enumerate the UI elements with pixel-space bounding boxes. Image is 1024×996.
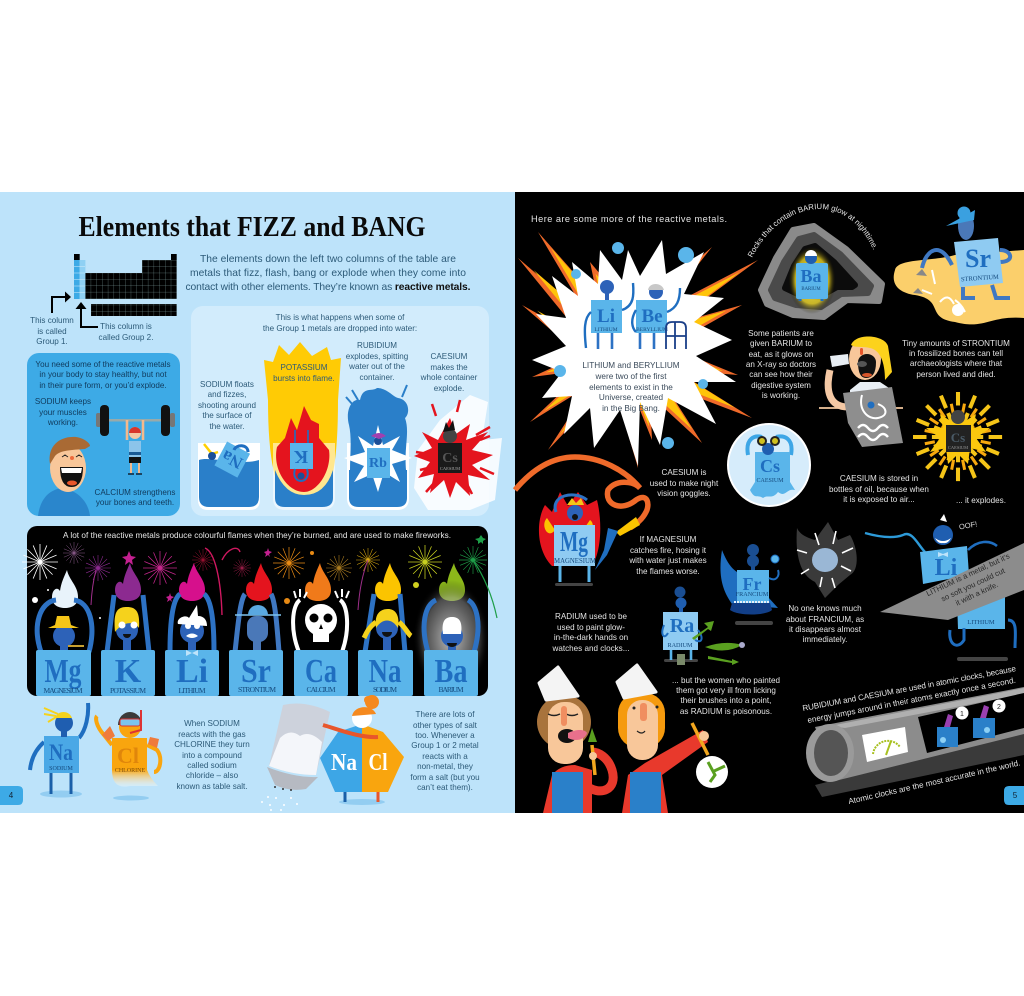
flame: potassium	[264, 342, 341, 510]
label: group 1: is called	[37, 327, 67, 336]
barium rock	[761, 226, 882, 317]
sodium text	[35, 397, 91, 427]
flames	[52, 563, 465, 608]
character: lithium	[585, 280, 633, 349]
character: lithium: LITHIUM	[594, 327, 618, 333]
label: group 2: called Group 2.	[99, 333, 153, 342]
salt text: can’t eat them).	[417, 783, 473, 792]
salt text: too. Whenever a	[415, 731, 475, 740]
caesium exploding in air	[913, 392, 1003, 482]
caesium goggle text: CAESIUM is	[662, 468, 706, 477]
right page intro: Here are some more of the reactive metals.	[531, 214, 727, 224]
character: barium glowing	[413, 580, 489, 696]
barium x-ray text: eat, as it glows on	[749, 350, 813, 359]
strontium text: in fossilized bones can tell	[909, 349, 1003, 358]
salt text: reacts with a	[422, 752, 468, 761]
sodium caption: the surface of	[202, 411, 252, 420]
glass: rubidium: Rb	[369, 456, 387, 471]
sodium text: your muscles	[39, 408, 87, 417]
salt text: There are lots of	[416, 710, 475, 719]
sodium caption: SODIUM floats	[200, 380, 254, 389]
painters text: them got very ill from licking	[676, 686, 776, 695]
character: calcium skeleton: Ca	[305, 653, 337, 690]
caesium goggles bubble: Cs	[760, 456, 780, 476]
big bang text: were two of the first	[594, 372, 667, 381]
character: beryllium: BERYLLIUM	[636, 327, 668, 333]
magnesium text: If MAGNESIUM	[640, 535, 697, 544]
sodium text: working.	[47, 418, 78, 427]
label: group 2	[99, 322, 153, 342]
glass: rubidium	[344, 385, 412, 510]
character: potassium: K	[115, 653, 142, 690]
radium text	[552, 612, 629, 653]
caesium caption	[420, 352, 478, 393]
character: barium glowing: BARIUM	[438, 685, 464, 694]
caesium oil text: bottles of oil, because when	[829, 485, 929, 494]
big bang text: in the Big Bang.	[602, 404, 660, 413]
potassium caption	[273, 363, 335, 383]
character: sodium: Na	[368, 653, 402, 690]
barium x-ray text: an X-ray so doctors	[746, 360, 816, 369]
painters text: as RADIUM is poisonous.	[680, 707, 772, 716]
icon: salt shaker	[261, 704, 330, 811]
panel caption: This is what happens when some of	[276, 313, 405, 322]
hose and magnesium: MAGNESIUM	[554, 558, 596, 565]
caesium exploding in air: CAESIUM	[948, 445, 968, 450]
character: strontium	[229, 594, 283, 696]
character: potassium: POTASSIUM	[110, 686, 146, 695]
explodes text: ... it explodes.	[956, 496, 1006, 505]
atomic clock	[806, 687, 1024, 797]
character: sodium chloride: Cl	[368, 750, 388, 776]
lithium cut with knife	[865, 514, 1024, 661]
magnesium text: with water just makes	[628, 556, 707, 565]
lithium cut with knife: LITHIUM	[967, 619, 995, 626]
caesium goggle text	[650, 468, 719, 498]
sodium caption: and fizzes,	[208, 390, 246, 399]
panel: fireworks	[22, 526, 497, 696]
character: strontium: STRONTIUM	[238, 685, 276, 694]
atoms in clock: 1	[960, 711, 964, 718]
knife text: it with a knife.	[954, 580, 1000, 608]
potassium caption: POTASSIUM	[280, 363, 328, 372]
panel: group 1 metals in water	[191, 306, 502, 516]
radium text: used to paint glow-	[557, 623, 625, 632]
caesium goggles bubble: CAESIUM	[756, 478, 784, 484]
caesium caption: whole container	[420, 373, 478, 382]
character: calcium skeleton: CALCIUM	[306, 685, 336, 694]
sodium chloride text: chloride – also	[186, 771, 239, 780]
character: beryllium	[632, 284, 686, 349]
rubidium caption: explodes, spitting	[346, 352, 408, 361]
character: strontium: Sr	[241, 653, 271, 690]
caesium oil text	[829, 474, 929, 504]
character: magnesium: MAGNESIUM	[44, 686, 83, 695]
panel text	[35, 360, 171, 390]
barium x-ray text	[746, 329, 816, 400]
arrow to group 2	[76, 302, 98, 327]
sodium chloride text: into a compound	[182, 751, 242, 760]
caesium goggle text: used to make night	[650, 479, 719, 488]
character: francium: FRANCIUM	[736, 591, 769, 598]
explosion: big bang	[518, 232, 758, 468]
character: radium	[662, 586, 745, 665]
intro text: metals that fizz, flash, bang or explode when they come into	[190, 268, 466, 279]
barium rock: BARIUM	[801, 287, 821, 292]
potassium caption: bursts into flame.	[273, 374, 335, 383]
caesium goggles bubble	[728, 424, 810, 506]
atoms in clock	[937, 700, 1006, 747]
character: sodium	[358, 594, 413, 696]
character: potassium	[101, 595, 155, 696]
sodium chloride text: reacts with the gas	[178, 730, 246, 739]
right page background	[515, 192, 1024, 813]
big bang text: LITHIUM and BERYLLIUM	[582, 361, 680, 370]
atomic clocks text: energy jumps around in their atoms exactly once a second.	[807, 676, 1016, 725]
falling meteors	[554, 242, 708, 449]
francium text: immediately.	[803, 635, 847, 644]
page number 4: 4	[9, 791, 14, 800]
glass: sodium: Na	[218, 446, 246, 473]
strontium text: archaeologists where that	[910, 359, 1003, 368]
label: group 1	[30, 316, 74, 346]
barium x-ray text: given BARIUM to	[750, 339, 813, 348]
strontium fossil digger: Sr	[965, 244, 991, 273]
flame: potassium: K	[294, 447, 308, 467]
strontium text: Tiny amounts of STRONTIUM	[902, 339, 1010, 348]
barium x-ray text: digestive system	[751, 381, 811, 390]
caesium goggle text: vision goggles.	[657, 489, 711, 498]
calcium text	[95, 488, 175, 507]
character: sodium with chlorine	[30, 703, 88, 798]
sodium chloride text	[174, 719, 250, 791]
icon: smiling boy	[38, 437, 90, 516]
icon: weightlifter	[96, 405, 175, 474]
painter licking brush	[537, 667, 613, 813]
painter holding clock	[617, 665, 728, 813]
magnesium text	[628, 535, 707, 576]
big bang text: Universe, created	[599, 393, 664, 402]
left page background	[0, 192, 515, 813]
character: lithium: LITHIUM	[178, 686, 206, 695]
caesium oil text: CAESIUM is stored in	[840, 474, 918, 483]
strontium text: person lived and died.	[916, 370, 996, 379]
sodium chloride text: called sodium	[187, 761, 237, 770]
barium x-ray text: is working.	[762, 391, 800, 400]
atoms in clock: 2	[997, 704, 1001, 711]
panel text: in your body to stay healthy, but not	[39, 370, 167, 379]
woman with x-ray	[819, 336, 903, 447]
character: magnesium	[36, 600, 92, 696]
intro text	[186, 254, 471, 293]
radium text: RADIUM used to be	[555, 612, 627, 621]
periodic table diagram	[74, 254, 177, 316]
calcium text: CALCIUM strengthens	[95, 488, 175, 497]
character: francium	[720, 544, 779, 625]
character: sodium with chlorine: SODIUM	[49, 766, 73, 772]
magnesium text: catches fire, hosing it	[630, 546, 707, 555]
character: calcium skeleton	[293, 589, 349, 696]
glass: caesium exploding: Cs	[442, 451, 458, 466]
francium text: No one knows much	[788, 604, 862, 613]
label: group 1: Group 1.	[36, 337, 68, 346]
salt text: non-metal, they	[417, 762, 474, 771]
magnesium text: the flames worse.	[636, 567, 700, 576]
sodium caption: the water.	[209, 422, 245, 431]
panel caption: the Group 1 metals are dropped into water:	[263, 324, 417, 333]
hose and magnesium: Mg	[560, 527, 588, 558]
character: sodium with chlorine: Na	[49, 740, 73, 765]
strontium fossil digger	[894, 206, 1024, 324]
calcium text: your bones and teeth.	[96, 498, 174, 507]
painters text	[672, 676, 780, 716]
firework bursts	[22, 535, 497, 619]
lithium cut with knife: OOF!	[958, 519, 978, 532]
barium rock: Ba	[800, 266, 822, 286]
sodium chloride text: known as table salt.	[176, 782, 248, 791]
page number 5	[1004, 786, 1024, 805]
knife text: LITHIUM is a metal, but it’s	[925, 551, 1011, 598]
sodium chloride text: CHLORINE they turn	[174, 740, 250, 749]
character: lithium	[165, 594, 219, 696]
radium text: in-the-dark hands on	[554, 633, 628, 642]
character: francium: Fr	[743, 574, 762, 594]
sodium caption	[198, 380, 256, 431]
character: sodium chloride	[320, 695, 404, 805]
intro text: contact with other elements. They’re known as reactive metals.	[186, 282, 471, 293]
hose and magnesium	[515, 457, 648, 586]
salt text: form a salt (but you	[410, 773, 480, 782]
character: chlorine: CHLORINE	[115, 768, 145, 774]
panel text: in their pure form, or you’d explode.	[39, 381, 167, 390]
title: Elements that FIZZ and BANG	[78, 212, 426, 243]
knife text: so soft you could cut	[940, 566, 1007, 603]
character: chlorine: Cl	[117, 743, 139, 768]
label: group 2: This column is	[100, 322, 152, 331]
panel caption	[263, 313, 417, 333]
painters text: their brushes into a point,	[681, 696, 771, 705]
sodium text: SODIUM keeps	[35, 397, 91, 406]
barium x-ray text: can see how their	[749, 370, 813, 379]
character: sodium chloride: Na	[331, 750, 357, 776]
big bang text: elements to exist in the	[589, 383, 673, 392]
caesium exploding in air: Cs	[951, 430, 965, 445]
character: radium: RADIUM	[667, 642, 693, 649]
page number 4	[0, 786, 23, 805]
painters text: ... but the women who painted	[672, 676, 780, 685]
radium text: watches and clocks...	[552, 644, 629, 653]
big bang text	[582, 361, 680, 413]
character: lithium: Li	[597, 306, 615, 327]
strontium fossil digger: STRONTIUM	[961, 274, 999, 283]
character: sodium: SODIUM	[373, 685, 397, 694]
panel text: You need some of the reactive metals	[35, 360, 171, 369]
francium text	[786, 604, 864, 644]
lithium cut with knife: Li	[935, 555, 958, 581]
rubidium caption: container.	[359, 373, 395, 382]
glass: caesium exploding: CAESIUM	[440, 466, 460, 471]
arrow to group 1	[52, 292, 71, 313]
caesium caption: CAESIUM	[431, 352, 468, 361]
francium disappearing silhouette	[797, 522, 857, 598]
rubidium caption	[346, 341, 408, 382]
character: beryllium: Be	[641, 306, 663, 327]
panel: reactive metals in your body	[27, 353, 180, 516]
sodium caption: shooting around	[198, 401, 256, 410]
sodium chloride text: When SODIUM	[184, 719, 240, 728]
francium text: it disappears almost	[789, 625, 862, 634]
francium text: about FRANCIUM, as	[786, 615, 864, 624]
salt text: Group 1 or 2 metal	[411, 741, 479, 750]
character: chlorine	[96, 710, 160, 800]
caesium oil text: it is exposed to air...	[843, 495, 915, 504]
glass: caesium exploding	[414, 395, 502, 510]
rubidium caption: RUBIDIUM	[357, 341, 397, 350]
barium x-ray text: Some patients are	[748, 329, 814, 338]
character: lithium: Li	[176, 653, 208, 690]
glass: sodium	[198, 442, 260, 510]
caesium caption: explode.	[434, 384, 464, 393]
atomic clocks text: RUBIDIUM and CAESIUM are used in atomic clocks, because	[802, 664, 1017, 713]
salt text: other types of salt	[413, 721, 478, 730]
character: magnesium: Mg	[44, 653, 82, 690]
character: radium: Ra	[670, 615, 694, 637]
caesium caption: makes the	[430, 363, 468, 372]
salt text	[410, 710, 480, 792]
label: group 1: This column	[30, 316, 74, 325]
strontium text	[902, 339, 1010, 379]
page number 5: 5	[1013, 791, 1018, 800]
curved barium caption: Rocks that contain BARIUM glow at nighttime.	[748, 204, 876, 258]
intro text: The elements down the left two columns of the table are	[200, 254, 456, 265]
character: barium glowing: Ba	[434, 653, 468, 690]
rubidium caption: water out of the	[348, 362, 405, 371]
atomic clock accuracy text: Atomic clocks are the most accurate in the world.	[847, 758, 1021, 806]
fireworks caption: A lot of the reactive metals produce colourful flames when they’re burned, and are used to make fireworks.	[63, 531, 451, 540]
